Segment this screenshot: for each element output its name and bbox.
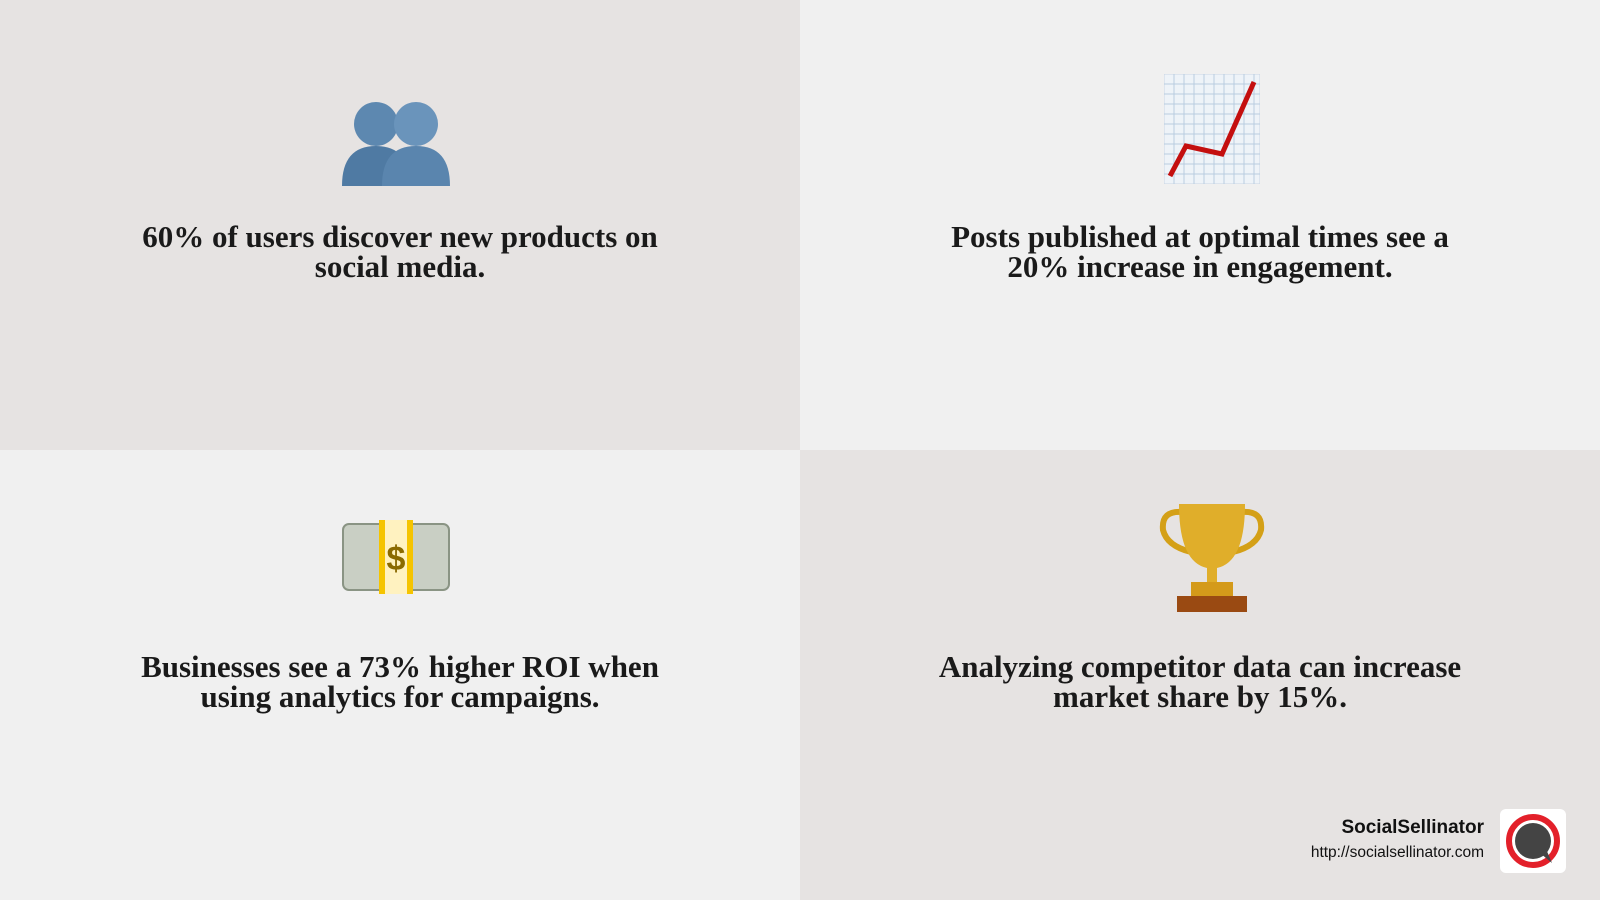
text: stat 4: Analyzing competitor data can increase bbox=[939, 649, 1461, 684]
logo bbox=[1500, 809, 1566, 873]
panel: top-right bbox=[800, 0, 1600, 450]
icon: chart bbox=[1164, 74, 1260, 184]
brand: name and url: SocialSellinator bbox=[1341, 817, 1484, 838]
icon: trophy bbox=[1160, 504, 1264, 612]
text: stat 4: market share by 15%. bbox=[1053, 679, 1347, 714]
text: stat 4 bbox=[939, 649, 1461, 714]
text: stat 3: Businesses see a 73% higher ROI when bbox=[141, 649, 659, 684]
text: stat 2: 20% increase in engagement. bbox=[1007, 249, 1393, 284]
text: stat 3 bbox=[141, 649, 659, 714]
text: stat 2: Posts published at optimal times see a bbox=[951, 219, 1449, 254]
brand: name and url bbox=[1311, 817, 1484, 861]
text: stat 1 bbox=[142, 219, 658, 284]
text: stat 1: 60% of users discover new products on bbox=[142, 219, 658, 254]
panel: bottom-right bbox=[800, 450, 1600, 900]
icon: money bbox=[342, 520, 450, 594]
text: stat 1: social media. bbox=[315, 249, 485, 284]
panel: top-left bbox=[0, 0, 800, 450]
icon: money: $ bbox=[387, 540, 406, 578]
text: stat 2 bbox=[951, 219, 1449, 284]
icon: users bbox=[342, 102, 450, 186]
panel: bottom-left bbox=[0, 450, 800, 900]
text: stat 3: using analytics for campaigns. bbox=[200, 679, 600, 714]
brand: name and url: http://socialsellinator.com bbox=[1311, 844, 1484, 861]
